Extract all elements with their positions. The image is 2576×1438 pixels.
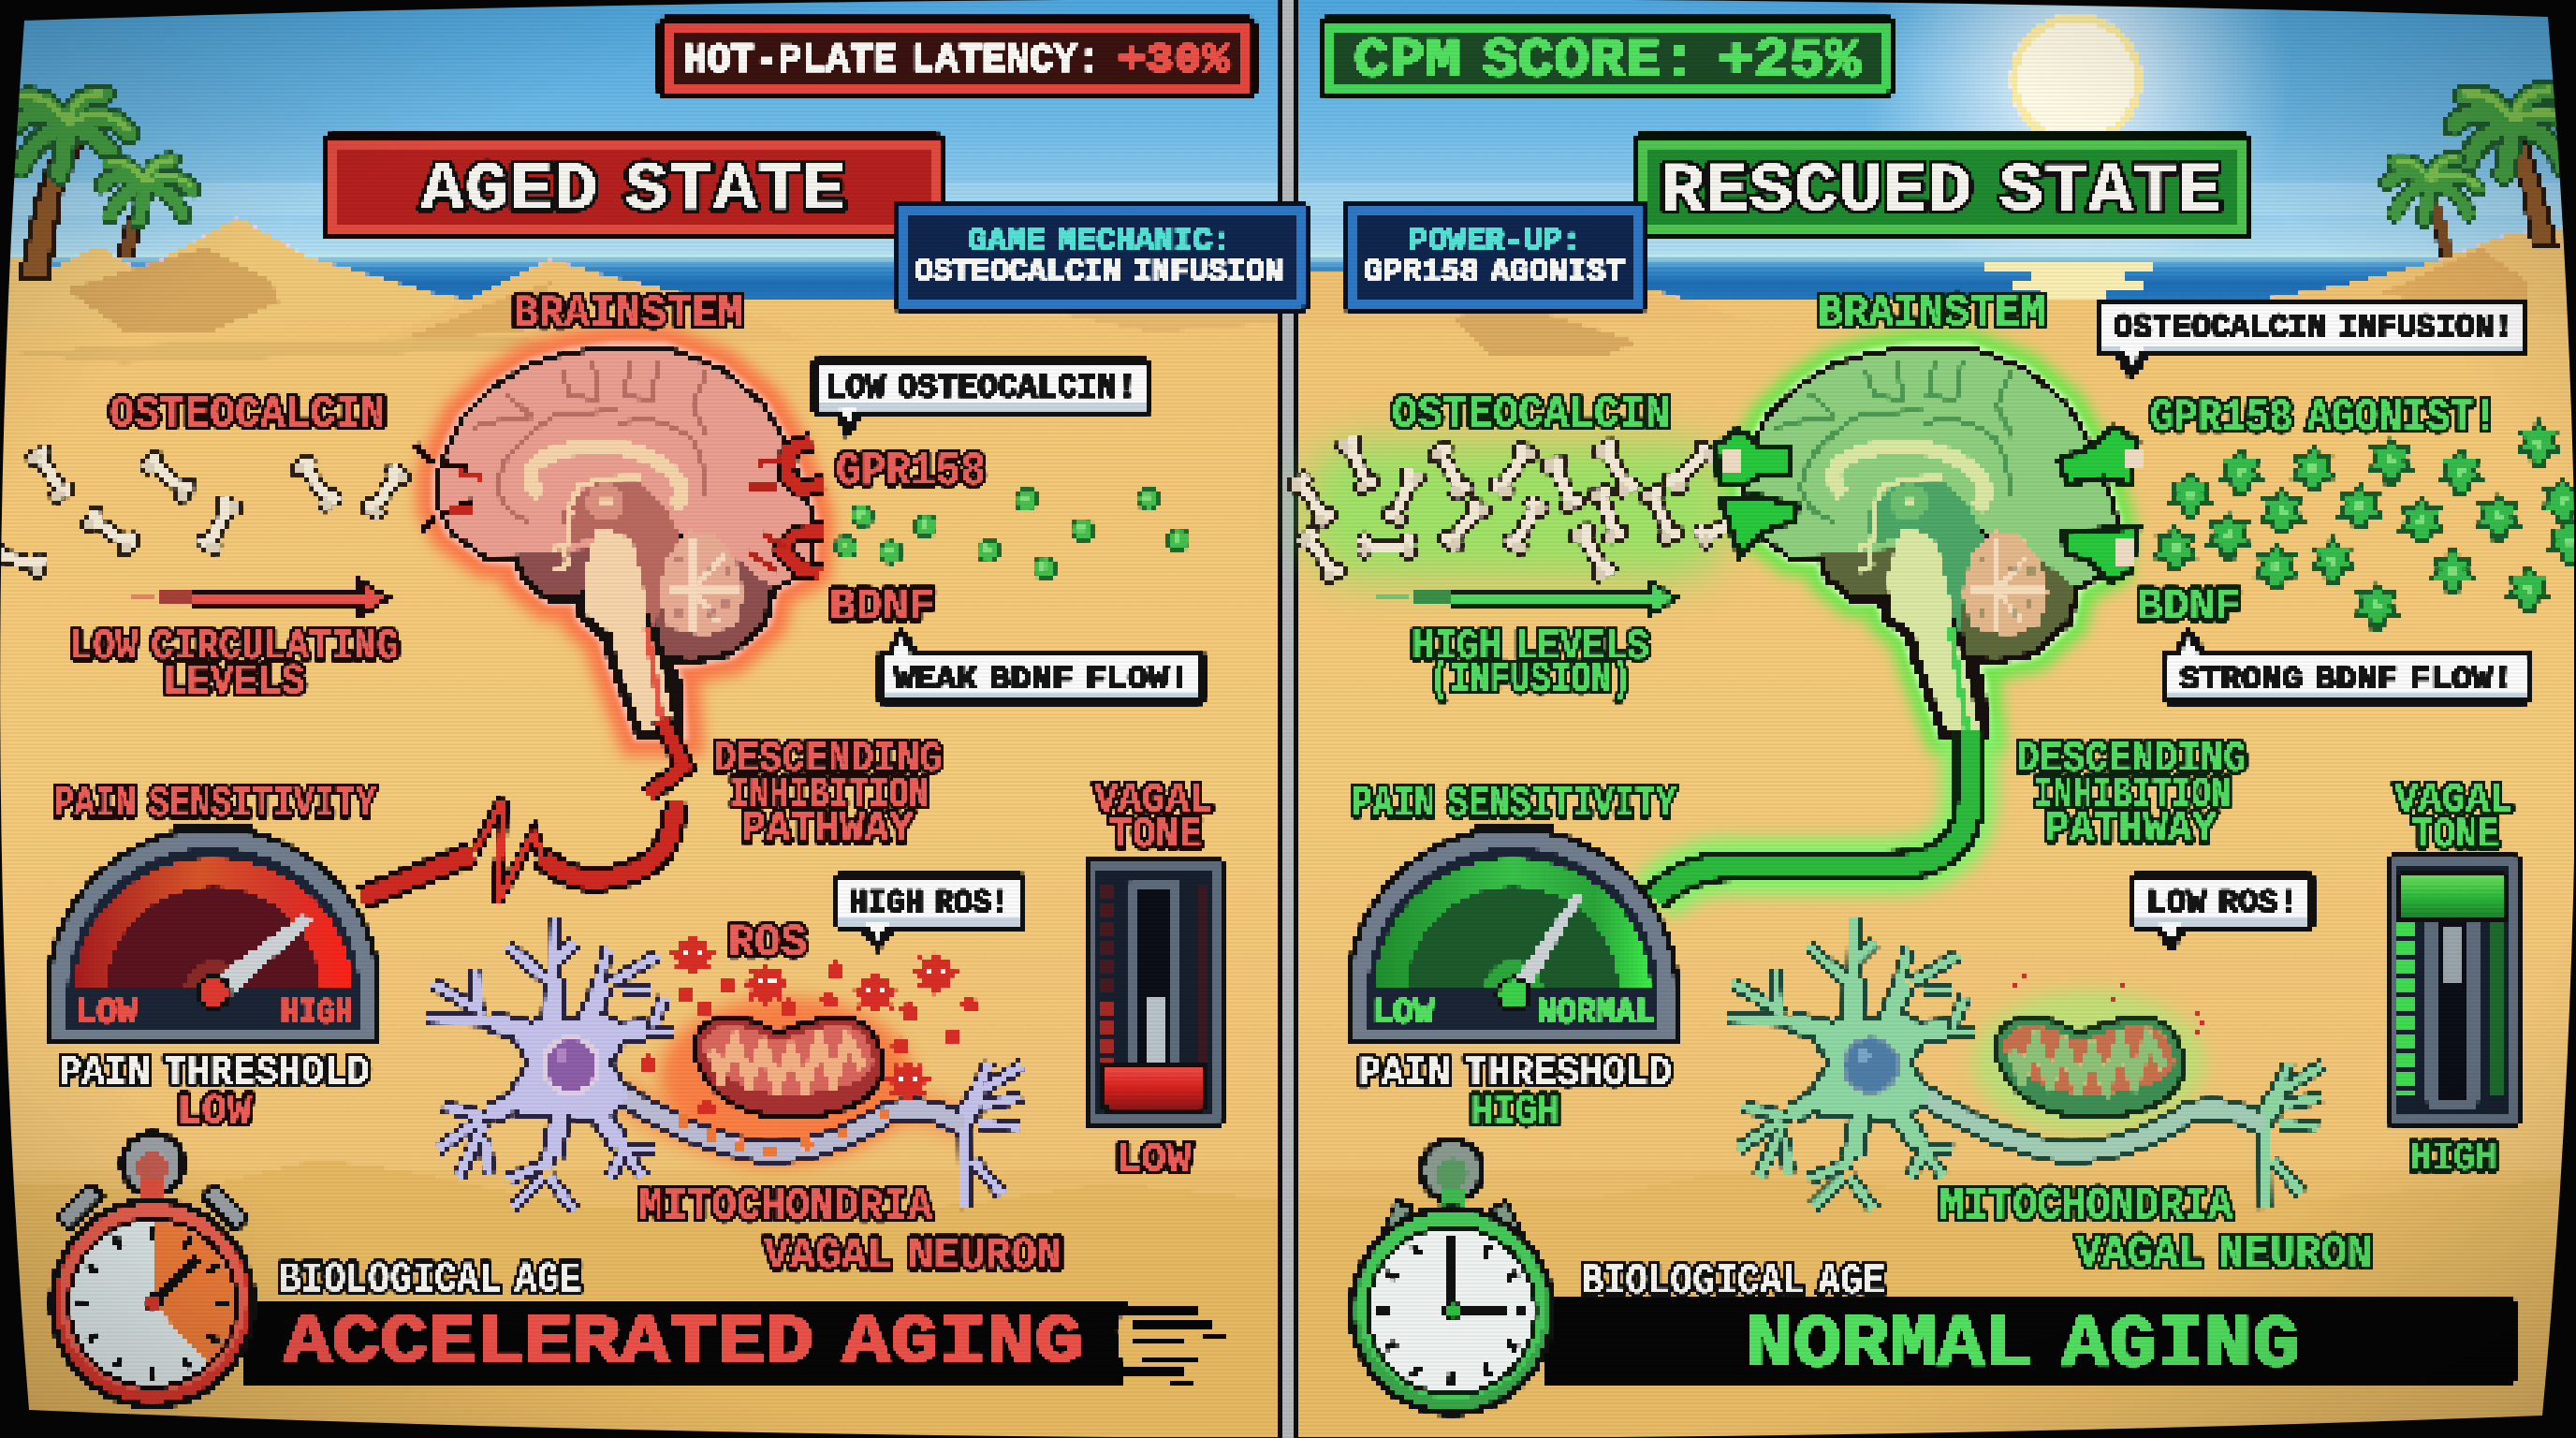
stat banner: hot-plate latency	[657, 16, 1257, 98]
label: mitochondria: MITOCHONDRIA	[1939, 1181, 2232, 1232]
label: inhibition: INHIBITION	[2033, 770, 2231, 819]
title banner: rescued state	[1632, 133, 2253, 241]
label: BDNF: BDNF	[829, 582, 935, 633]
ROS particles	[640, 932, 978, 1116]
label: biological age: BIOLOGICAL AGE	[279, 1256, 581, 1304]
gauge label: normal: NORMAL	[1537, 993, 1655, 1034]
bubble text: low ROS: LOW ROS!	[2146, 885, 2298, 922]
status: accelerated aging: ACCELERATED AGING	[284, 1304, 1083, 1382]
centre divider	[1278, 0, 1298, 1438]
bubble text: low osteocalcin: LOW OSTEOCALCIN!	[826, 369, 1137, 407]
broken descending inhibition pathway	[361, 719, 684, 902]
label: infusion: (INFUSION)	[1429, 656, 1632, 704]
heading: rescued state: RESCUED STATE	[1660, 153, 2222, 230]
panel: aged state	[0, 16, 1310, 1409]
mitochondrion: damaged	[691, 1014, 886, 1121]
value: vagal low: LOW	[1116, 1137, 1193, 1183]
label: vagal neuron: VAGAL NEURON	[764, 1231, 1062, 1282]
bones: low osteocalcin	[0, 440, 415, 581]
info box: power-up	[1341, 201, 1649, 312]
bubble text: high ROS: HIGH ROS!	[849, 885, 1010, 922]
label: osteocalcin infusion: OSTEOCALCIN INFUSION	[915, 254, 1283, 291]
rescued panel artwork	[1283, 16, 2576, 1416]
aged panel artwork	[0, 16, 1310, 1409]
label: hot-plate latency: HOT-PLATE LATENCY:	[683, 37, 1101, 84]
damaged receptors: GPR158	[417, 442, 824, 573]
vagal neuron: rescued	[1728, 917, 2322, 1210]
bubble text: osteocalcin infusion: OSTEOCALCIN INFUSION!	[2114, 309, 2513, 347]
label: low circulating levels line 2: LEVELS	[163, 658, 305, 706]
speech bubble: osteocalcin infusion	[2097, 298, 2528, 382]
label: vagal: VAGAL	[2394, 777, 2513, 824]
label: biological age: BIOLOGICAL AGE	[1581, 1258, 1885, 1306]
label: pain threshold: PAIN THRESHOLD	[1358, 1050, 1672, 1097]
label: tone: TONE	[2411, 811, 2499, 859]
label: GPR158 agonist: GPR158 AGONIST	[1364, 254, 1625, 291]
brain: aged	[440, 349, 812, 733]
speech bubble: low osteocalcin	[812, 358, 1150, 440]
label: ROS: ROS	[728, 918, 807, 969]
brain glow: aged	[440, 349, 964, 1156]
label: inhibition: INHIBITION	[729, 770, 929, 819]
label: pain threshold: PAIN THRESHOLD	[59, 1049, 370, 1096]
label: vagal neuron: VAGAL NEURON	[2076, 1229, 2372, 1280]
bones: high osteocalcin	[1283, 431, 1757, 589]
gauge label: high: HIGH	[281, 993, 353, 1034]
arrow: low circulating levels	[131, 577, 393, 620]
gauge: pain sensitivity rescued	[1346, 824, 1679, 1046]
label: brainstem: BRAINSTEM	[1818, 288, 2045, 339]
value: high: HIGH	[1471, 1088, 1559, 1137]
stat banner: CPM score	[1319, 16, 1895, 98]
label: low circulating levels line 1: LOW CIRCULATING	[70, 624, 399, 671]
label: +30%: +30%	[1118, 37, 1231, 84]
rescued panel labels	[1352, 30, 2513, 1387]
brain glow: rescued	[1306, 349, 2206, 1136]
vagal neuron: aged	[428, 917, 1022, 1210]
aged panel labels	[53, 37, 1283, 1382]
label: pain sensitivity: PAIN SENSITIVITY	[53, 780, 376, 829]
label: brainstem: BRAINSTEM	[513, 289, 743, 340]
ROS specks: low	[2012, 974, 2204, 1034]
speech bubble: strong BDNF flow	[2163, 625, 2531, 705]
gauge label: low: LOW	[1372, 993, 1434, 1034]
bubble text: strong BDNF flow: STRONG BDNF FLOW!	[2179, 663, 2513, 698]
value: vagal high: HIGH	[2409, 1136, 2497, 1182]
gauge label: low: LOW	[76, 993, 138, 1034]
title banner: aged state	[323, 133, 944, 241]
value: low: LOW	[177, 1088, 252, 1136]
arrow: high levels	[1378, 577, 1681, 620]
particles: BDNF strong flow	[2152, 418, 2576, 630]
stopwatch: normal	[1348, 1137, 1556, 1416]
gauge: pain sensitivity aged	[46, 824, 381, 1046]
label: tone: TONE	[1109, 811, 1202, 859]
label: GPR158 agonist exclamation: GPR158 AGONIST!	[2150, 393, 2497, 444]
black bar: biological age rescued	[1544, 1297, 2518, 1384]
brain: rescued	[1744, 349, 2115, 733]
info box: game mechanic	[892, 201, 1310, 312]
speech bubble: high ROS	[834, 873, 1027, 953]
label: pathway: PATHWAY	[2045, 805, 2217, 854]
label: pain sensitivity: PAIN SENSITIVITY	[1352, 780, 1676, 829]
label: vagal: VAGAL	[1094, 777, 1213, 824]
heading: aged state: AGED STATE	[420, 152, 846, 229]
particles: BDNF weak flow	[834, 487, 1191, 580]
bubble text: weak BDNF flow: WEAK BDNF FLOW!	[894, 663, 1190, 698]
status: normal aging: NORMAL AGING	[1746, 1303, 2300, 1387]
label: mitochondria: MITOCHONDRIA	[638, 1182, 932, 1233]
speech bubble: low ROS	[2130, 873, 2315, 953]
mitochondrion: healthy	[1992, 1014, 2187, 1121]
meter: vagal tone low	[1084, 855, 1224, 1129]
label: descending: DESCENDING	[713, 735, 943, 784]
label: osteocalcin: OSTEOCALCIN	[1392, 390, 1670, 440]
label: pathway: PATHWAY	[741, 805, 914, 854]
label: GPR158: GPR158	[836, 446, 986, 499]
stopwatch: accelerated	[49, 1130, 256, 1409]
label: descending: DESCENDING	[2016, 735, 2247, 784]
intact descending inhibition pathway	[1654, 728, 1969, 900]
active receptors: GPR158	[1720, 431, 2144, 578]
speech bubble: weak BDNF flow	[877, 625, 1206, 705]
label: BDNF: BDNF	[2137, 582, 2241, 633]
label: CPM score: CPM SCORE: +25%	[1354, 30, 1862, 93]
label: game mechanic: GAME MECHANIC:	[968, 223, 1232, 260]
label: power-up: POWER-UP:	[1409, 223, 1581, 260]
panel: rescued state	[1283, 16, 2576, 1416]
label: osteocalcin: OSTEOCALCIN	[110, 390, 386, 440]
black bar: biological age aged	[245, 1299, 1225, 1386]
meter: vagal tone high	[2385, 854, 2524, 1127]
label: high levels: HIGH LEVELS	[1412, 624, 1649, 671]
